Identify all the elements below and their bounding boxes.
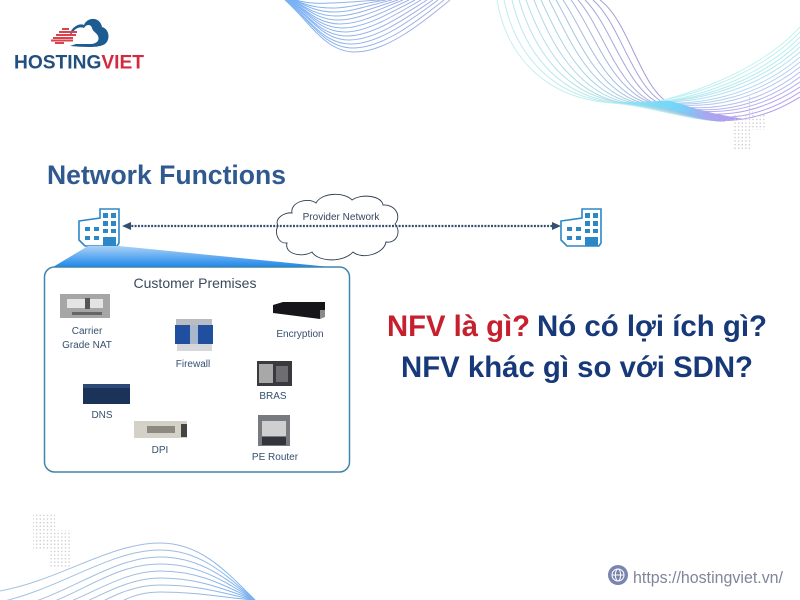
decorative wave: top right descending [497, 0, 725, 121]
arrow: dotted link between sites [122, 222, 561, 230]
device: encryption: Encryption [276, 329, 324, 340]
icon: building left [79, 209, 119, 246]
headline line 1 red part: NFV là gì? [387, 310, 530, 343]
icon: building right [561, 209, 601, 246]
heading: Network Functions: Network Functions [47, 160, 286, 190]
panel heading: Customer Premises [134, 275, 256, 291]
website footer [608, 565, 783, 587]
icon: globe [608, 565, 628, 585]
decorative wave: top right rising [660, 27, 800, 120]
device: firewall: Firewall [176, 359, 210, 370]
callout wedge [53, 246, 330, 267]
device: firewall [175, 319, 213, 370]
logo wordmark: HOSTINGVIET [14, 52, 144, 74]
device: PE router [252, 415, 299, 463]
device: BRAS: BRAS [259, 391, 287, 402]
headline line 1 blue part: Nó có lợi ích gì? [537, 310, 767, 343]
device: encryption [273, 302, 325, 340]
device: carrier grade NAT: Carrier [72, 326, 103, 337]
device: PE router: PE Router [252, 452, 299, 463]
cloud label: Provider Network [303, 212, 380, 223]
device: DPI: DPI [152, 445, 168, 456]
device: DPI [134, 421, 187, 456]
device: BRAS [257, 361, 292, 402]
decorative wave: top centre [285, 0, 450, 52]
headline [387, 310, 767, 384]
decorative wave: bottom left [0, 543, 255, 600]
dot pattern: bottom left [33, 513, 70, 567]
device: carrier grade NAT: Grade NAT [62, 340, 112, 351]
panel: customer premises [44, 267, 350, 472]
website url: https://hostingviet.vn/ [633, 568, 783, 587]
icon: cloud [51, 19, 109, 47]
headline line 2: NFV khác gì so với SDN? [401, 351, 753, 384]
logo: HostingViet [14, 19, 144, 73]
dot pattern: top right [732, 97, 765, 150]
device: DNS: DNS [91, 410, 113, 421]
cloud: provider network [276, 194, 398, 260]
device: carrier grade NAT [60, 294, 112, 351]
decorative wave: converging ribbon [610, 101, 745, 121]
device: DNS [83, 384, 130, 421]
